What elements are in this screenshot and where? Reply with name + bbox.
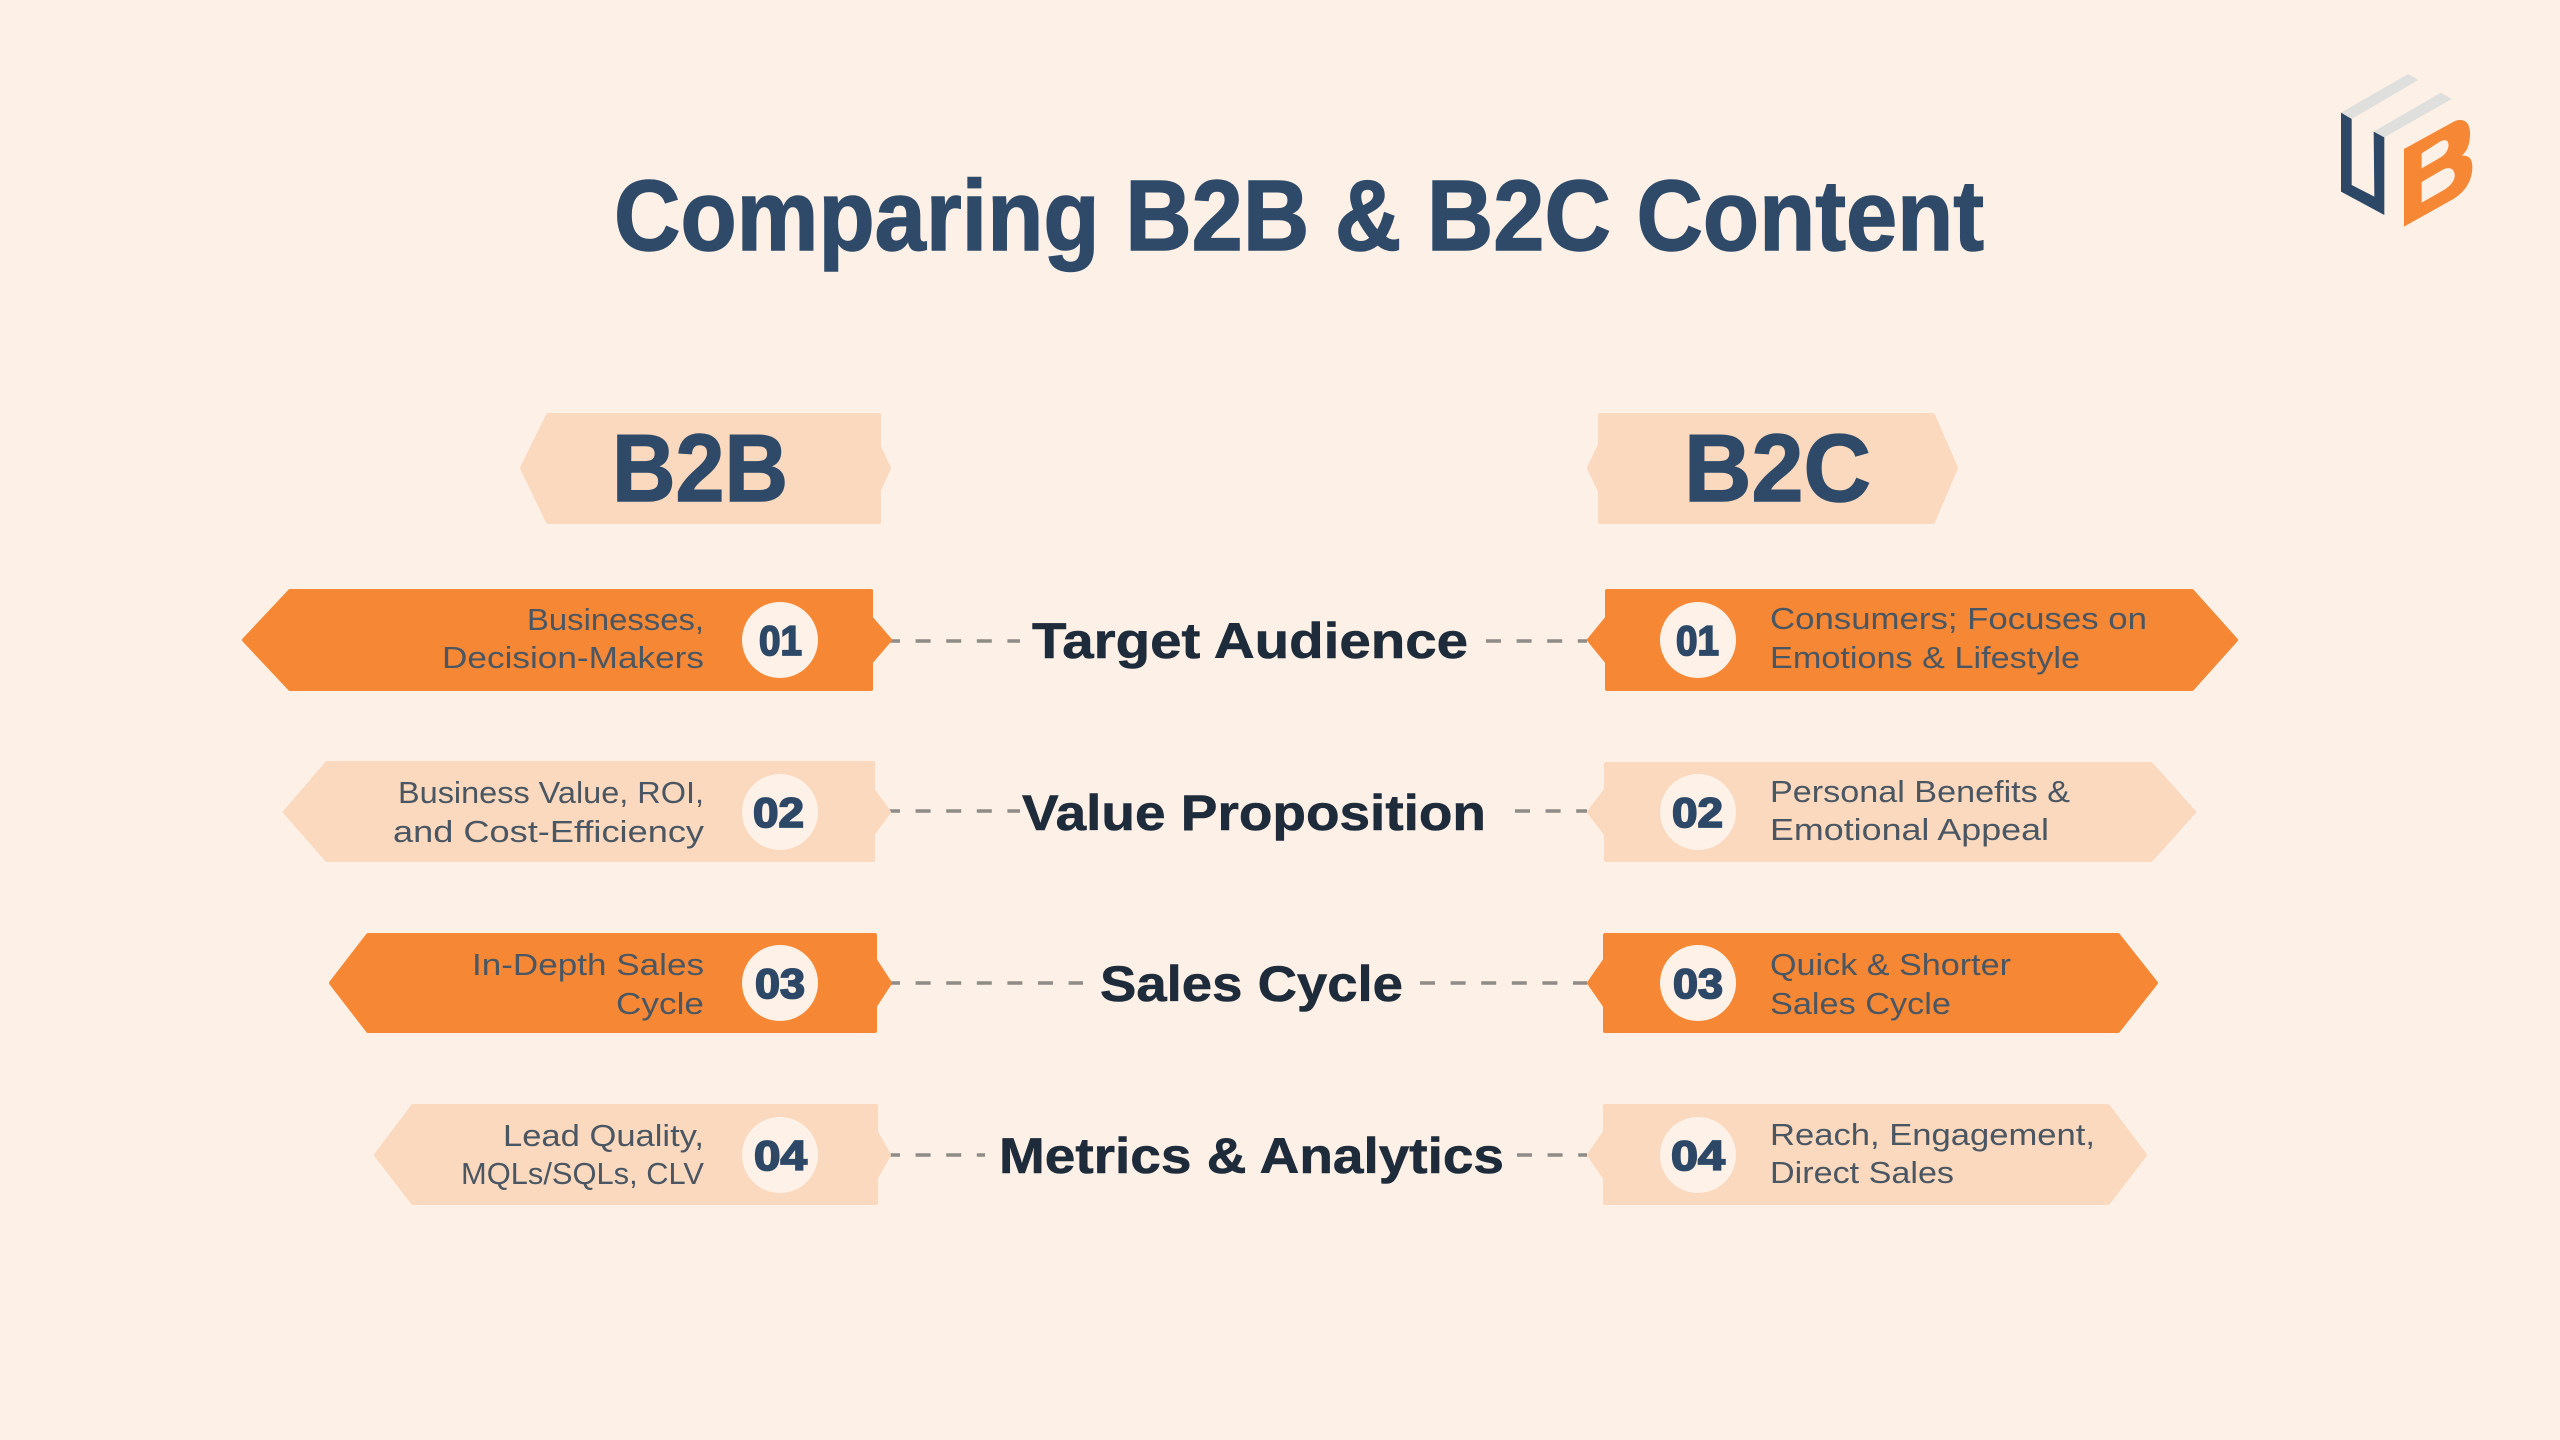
badge: 03 xyxy=(1660,945,1736,1021)
text: Lead Quality, MQLs/SQLs, CLV: MQLs/SQLs, CLV xyxy=(461,1156,704,1191)
text: Quick & Shorter Sales Cycle: Quick & Shorter xyxy=(1770,947,2011,982)
badge: 04: 04 xyxy=(754,1132,808,1179)
panel: B2C row 4 xyxy=(1589,1106,2145,1203)
badge: 04 xyxy=(1660,1117,1736,1193)
connector: row 4 dashes xyxy=(885,1153,1587,1157)
text: Consumers; Focuses on Emotions & Lifestyle: Emotions & Lifestyle xyxy=(1770,640,2080,675)
panel: B2B row 3 xyxy=(331,935,890,1031)
text: Businesses, Decision-Makers xyxy=(442,602,704,675)
text: Personal Benefits & Emotional Appeal: Personal Benefits & xyxy=(1770,774,2070,809)
label: Value Proposition: Value Proposition xyxy=(1022,785,1486,841)
text: Business Value, ROI, and Cost-Efficiency xyxy=(393,775,705,849)
text: Businesses, Decision-Makers: Businesses, xyxy=(527,602,704,637)
panel: B2C row 1 xyxy=(1589,591,2236,689)
text: Reach, Engagement, Direct Sales: Direct Sales xyxy=(1770,1155,1954,1190)
badge: 01 xyxy=(1660,602,1736,678)
badge: 01: 01 xyxy=(759,617,802,664)
text: Business Value, ROI, and Cost-Efficiency: Business Value, ROI, xyxy=(398,775,704,810)
label: Metrics & Analytics: Metrics & Analytics xyxy=(999,1128,1504,1184)
connector: row 3 dashes xyxy=(885,981,1587,985)
label: Target Audience: Target Audience xyxy=(1032,613,1468,669)
panel: B2B row 4 xyxy=(376,1106,889,1203)
text: In-Depth Sales Cycle: Cycle xyxy=(616,986,704,1021)
panel: B2B header banner xyxy=(522,415,889,522)
panel: B2C header banner xyxy=(1589,415,1956,522)
text: Businesses, Decision-Makers: Decision-Makers xyxy=(442,640,704,675)
badge: 02: 02 xyxy=(1672,789,1723,836)
badge: 02 xyxy=(742,774,818,850)
connector: row 2 dashes xyxy=(885,809,1587,813)
badge: 02 xyxy=(1660,774,1736,850)
text: Consumers; Focuses on Emotions & Lifestyle: Consumers; Focuses on xyxy=(1770,601,2147,636)
badge: 01: 01 xyxy=(1676,617,1719,664)
badge: 04 xyxy=(742,1117,818,1193)
badge: 03: 03 xyxy=(1673,960,1723,1007)
heading: B2C: B2C xyxy=(1684,415,1871,522)
text: Business Value, ROI, and Cost-Efficiency: and Cost-Efficiency xyxy=(393,814,705,849)
connector: row 1 dashes xyxy=(885,639,1587,643)
badge: 03: 03 xyxy=(755,960,805,1007)
panel: B2B row 2 xyxy=(285,763,889,860)
text: In-Depth Sales Cycle: In-Depth Sales xyxy=(472,947,704,982)
text: Personal Benefits & Emotional Appeal xyxy=(1770,774,2070,847)
text: Lead Quality, MQLs/SQLs, CLV xyxy=(461,1118,704,1191)
text: Personal Benefits & Emotional Appeal: Emotional Appeal xyxy=(1770,812,2049,847)
text: Quick & Shorter Sales Cycle xyxy=(1770,947,2011,1021)
title: Comparing B2B & B2C Content xyxy=(614,160,1984,272)
badge: 04: 04 xyxy=(1671,1132,1726,1179)
label: Sales Cycle: Sales Cycle xyxy=(1100,956,1403,1012)
panel: B2B row 1 xyxy=(244,591,890,689)
text: In-Depth Sales Cycle xyxy=(472,947,704,1021)
panel: B2C row 3 xyxy=(1589,935,2156,1031)
icon: UB logo xyxy=(2341,74,2472,227)
badge: 01 xyxy=(742,602,818,678)
badge: 02: 02 xyxy=(753,789,804,836)
text: Lead Quality, MQLs/SQLs, CLV: Lead Quality, xyxy=(503,1118,704,1153)
heading: B2B: B2B xyxy=(612,415,788,522)
text: Consumers; Focuses on Emotions & Lifestyle xyxy=(1770,601,2147,675)
text: Quick & Shorter Sales Cycle: Sales Cycle xyxy=(1770,986,1951,1021)
text: Reach, Engagement, Direct Sales xyxy=(1770,1117,2095,1190)
text: Reach, Engagement, Direct Sales: Reach, Engagement, xyxy=(1770,1117,2095,1152)
panel: B2C row 2 xyxy=(1589,764,2194,860)
badge: 03 xyxy=(742,945,818,1021)
